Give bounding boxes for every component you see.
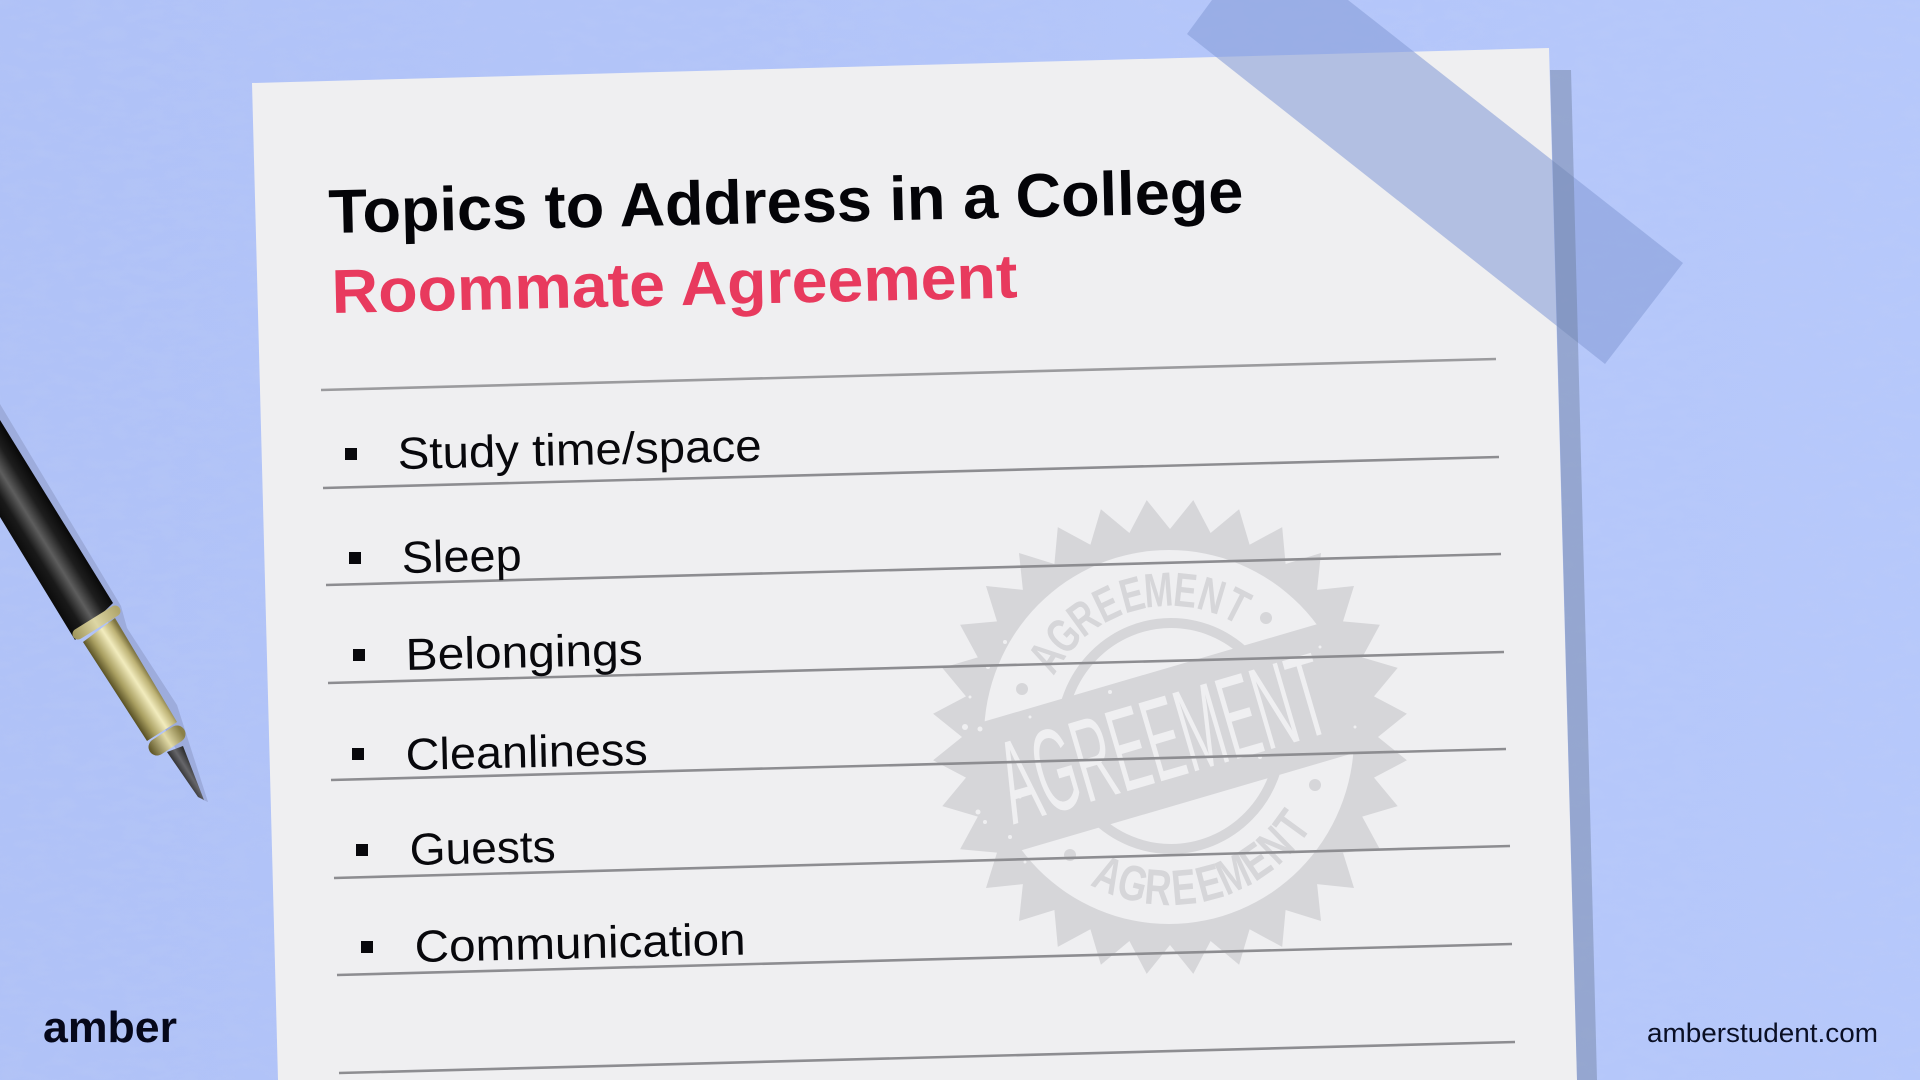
stamp: agreement seal <box>933 500 1407 974</box>
logo: amber: amber <box>43 1003 177 1052</box>
item: guests: Guests <box>409 821 556 875</box>
stamp: agreement seal: A <box>1085 845 1132 906</box>
stamp: agreement seal: N <box>1192 566 1232 625</box>
item: belongings: Belongings <box>405 624 643 680</box>
ruled lines <box>321 359 1515 1073</box>
stamp: agreement seal: M <box>1208 843 1259 906</box>
item: sleep <box>349 529 522 583</box>
stamp: agreement seal: R <box>1143 859 1174 917</box>
stamp: agreement seal: E <box>1171 562 1200 618</box>
stamp: agreement seal: E <box>1190 853 1228 913</box>
paper shadow strip <box>1550 70 1597 1080</box>
stamp: agreement seal: T <box>1215 577 1259 634</box>
title line 2: Roommate Agreement <box>331 242 1018 327</box>
item: sleep: Sleep <box>401 529 522 583</box>
stamp: agreement seal: G <box>1034 607 1092 664</box>
stamp: agreement seal: E <box>1169 859 1199 917</box>
item: cleanliness: Cleanliness <box>405 724 648 780</box>
stamp: agreement seal: M <box>1142 562 1175 618</box>
list: topics <box>345 420 762 972</box>
stamp: agreement seal: R <box>1057 588 1109 647</box>
stamp: agreement seal: E <box>1230 832 1282 892</box>
website url: amberstudent.com <box>1647 1018 1878 1048</box>
icon: pen <box>0 404 208 802</box>
item: communication: Communication <box>414 914 746 972</box>
stamp: agreement seal: N <box>1247 816 1305 875</box>
item: study time/space: Study time/space <box>397 420 762 479</box>
tape over paper <box>1187 0 1683 364</box>
stamp: agreement seal: E <box>1114 565 1150 623</box>
stamp: agreement seal: E <box>1084 574 1128 633</box>
stamp: agreement seal: G <box>1112 853 1154 914</box>
title <box>328 157 1244 327</box>
panel: paper sheet <box>252 48 1577 1080</box>
stamp: agreement seal: A <box>1017 631 1076 682</box>
title line 1: Topics to Address in a College <box>328 157 1244 247</box>
stamp: agreement seal: T <box>1263 800 1322 852</box>
stamp: agreement seal: AGREEMENT <box>984 629 1342 849</box>
